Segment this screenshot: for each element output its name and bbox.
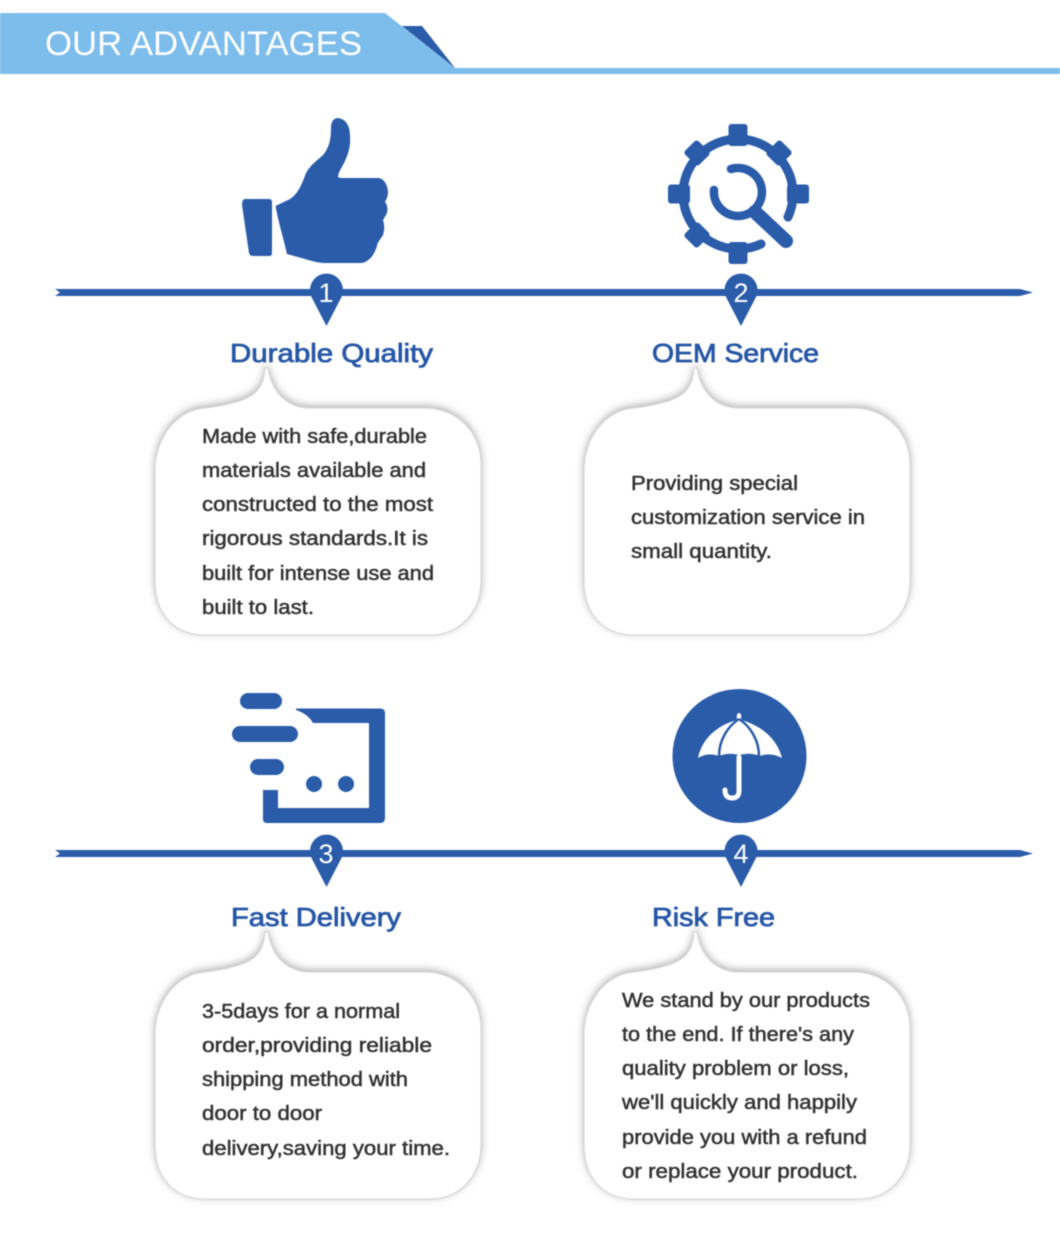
panel: risk free — [342, 689, 1033, 1199]
body text: rigorous standards.It is — [202, 528, 428, 550]
icon: gear with magnifier — [668, 124, 809, 264]
title: OUR ADVANTAGES — [45, 25, 362, 63]
timeline 1 right — [342, 289, 1033, 296]
body text: order,providing reliable — [202, 1035, 432, 1057]
timeline 2 left — [55, 850, 326, 857]
body text: shipping method with — [202, 1069, 408, 1091]
body text — [621, 990, 870, 1183]
body text: delivery,saving your time. — [202, 1138, 450, 1160]
body text: Providing special — [631, 473, 798, 495]
body text: to the end. If there's any — [622, 1024, 854, 1046]
timeline 1 left — [55, 289, 326, 296]
panel: OEM service — [342, 124, 1033, 635]
marker 3 — [310, 835, 343, 887]
body text: 3-5days for a normal — [202, 1001, 400, 1023]
icon: delivery box — [232, 693, 385, 823]
body text: small quantity. — [631, 541, 772, 563]
body text: Made with safe,durable — [202, 426, 427, 448]
header fold triangle — [402, 26, 455, 68]
marker 1: 1 — [318, 278, 334, 308]
heading: Durable Quality — [230, 338, 433, 368]
body text: door to door — [202, 1103, 322, 1125]
marker 4 — [725, 835, 757, 887]
heading: OEM Service — [652, 338, 819, 368]
speech bubble — [155, 932, 481, 1199]
marker 1 — [310, 274, 343, 326]
body text: we'll quickly and happily — [621, 1092, 857, 1114]
header banner — [0, 13, 1060, 74]
body text: or replace your product. — [622, 1161, 858, 1183]
body text: constructed to the most — [202, 494, 433, 516]
body text: built for intense use and — [202, 563, 434, 585]
body text — [202, 1001, 450, 1160]
panel: fast delivery — [55, 693, 481, 1199]
heading: Risk Free — [652, 902, 775, 932]
marker 2: 2 — [733, 278, 749, 308]
body text: quality problem or loss, — [622, 1058, 849, 1080]
timeline 2 right — [342, 850, 1033, 857]
panel: durable quality — [55, 118, 481, 635]
body text: provide you with a refund — [622, 1127, 867, 1149]
icon: thumbs up — [242, 118, 388, 263]
marker 4: 4 — [733, 839, 749, 869]
marker 2 — [724, 274, 757, 326]
marker 3: 3 — [318, 839, 334, 869]
speech bubble — [584, 932, 910, 1199]
body text — [202, 426, 434, 619]
body text: materials available and — [202, 460, 426, 482]
body text — [631, 473, 865, 563]
body text: We stand by our products — [622, 990, 870, 1012]
speech bubble — [155, 368, 481, 635]
body text: built to last. — [202, 597, 314, 619]
icon: umbrella — [672, 689, 806, 823]
body text: customization service in — [631, 507, 865, 529]
speech bubble — [584, 368, 910, 635]
heading: Fast Delivery — [231, 902, 401, 932]
